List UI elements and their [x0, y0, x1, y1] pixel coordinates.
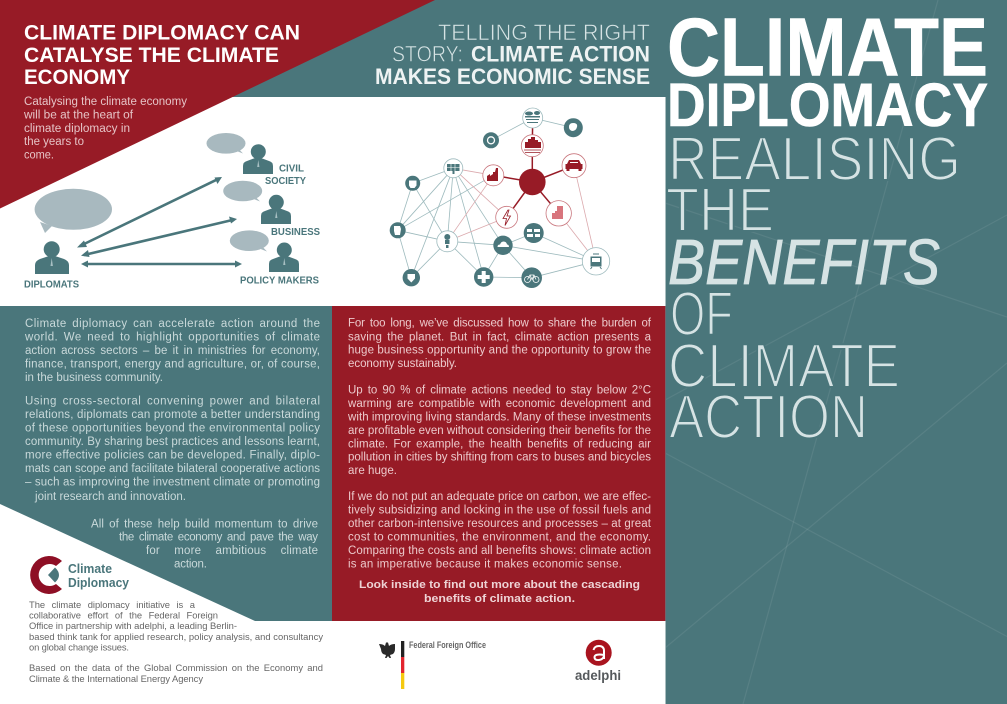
text block: catalysing intro: [23, 96, 187, 162]
text block: left body copy: – such as improving the investment climate or promoting: [25, 476, 320, 488]
flag bar: [401, 641, 404, 689]
text block: red body copy: economy sustainably.: [348, 358, 457, 370]
icon: diplomat person: [35, 241, 69, 274]
text block: red body copy: If we do not put an adequate price on carbon, we are effec-: [348, 491, 651, 503]
text block: initiative description: The climate diplomacy initiative is a: [29, 599, 196, 610]
red network links: [447, 166, 596, 261]
red hub links: [493, 118, 574, 217]
node: central hub: [519, 169, 546, 195]
heading: telling the right story: [375, 20, 650, 89]
panel: left teal body: [0, 306, 332, 621]
text block: left body copy: All of these help build momentum to drive: [91, 518, 318, 530]
heading: climate diplomacy can catalyse: ECONOMY: [24, 65, 130, 89]
logo wordmark: Climate: [68, 561, 112, 576]
office name: Federal Foreign Office: [409, 640, 486, 650]
text block: left body copy: more effective policies can be developed. Finally, diplo-: [25, 450, 320, 462]
node: bicycle: [521, 267, 542, 288]
heading: climate diplomacy can catalyse: CLIMATE DIPLOMACY CAN: [24, 20, 300, 44]
node: light bulb: [437, 231, 458, 252]
node: car: [562, 154, 586, 178]
text block: left body copy: Using cross-sectoral convening power and bilateral: [25, 396, 320, 408]
heading: telling the right story: STORY:: [392, 42, 463, 67]
text block: left body copy: for more ambitious climate: [146, 545, 318, 557]
text block: initiative description: Office in partnership with adelphi, a leading Berlin-: [29, 620, 237, 631]
callout: look inside: benefits of climate action.: [424, 593, 575, 605]
text block: left body copy: joint research and innovation.: [34, 491, 186, 503]
arrow: diplomats to business: [81, 216, 237, 257]
logo: adelphi: [575, 640, 621, 683]
node: city farm: [521, 135, 543, 157]
adelphi wordmark: adelphi: [575, 667, 621, 683]
node: recycling: [483, 132, 499, 148]
subtitle: realising the benefits of climate action: ACTION: [669, 383, 868, 452]
text block: red body copy: pollution in cities by shifting from cars to buses and bicycles: [348, 452, 651, 464]
teal network links: [398, 118, 596, 278]
text block: left body copy: relations, diplomats can promote a better understanding: [25, 409, 320, 421]
node: solar panel: [444, 159, 463, 178]
icon: business person: [261, 195, 291, 224]
text block: catalysing intro: come.: [24, 150, 54, 162]
icon: adelphi mark: [586, 640, 612, 666]
text block: initiative description: based think tank for applied research, policy analysis, and consultancy: [29, 631, 323, 642]
subtitle: realising the benefits of climate action: CLIMATE: [668, 332, 900, 401]
label: business: BUSINESS: [271, 227, 320, 238]
node: cloud: [493, 236, 513, 255]
text block: initiative description: [29, 599, 323, 684]
text block: initiative description: on global change issues.: [29, 642, 129, 652]
heading: telling the right story: CLIMATE ACTION: [471, 42, 650, 67]
text block: initiative description: Based on the data of the Global Commission on the Economy and: [29, 662, 323, 673]
title: climate diplomacy: [667, 0, 988, 140]
logo wordmark: Diplomacy: [68, 575, 130, 590]
node: health cross: [474, 267, 493, 287]
subtitle: realising the benefits of climate action: BENEFITS: [668, 226, 940, 298]
node: farm: [523, 108, 543, 128]
label: diplomats: DIPLOMATS: [24, 280, 79, 291]
text block: left body copy: finance, transport, energy and agriculture, or, of course,: [25, 358, 320, 370]
label: civil society: SOCIETY: [265, 176, 306, 187]
heading: telling the right story: MAKES ECONOMIC SENSE: [375, 64, 650, 89]
text block: left body copy: [24, 318, 320, 570]
text block: red body copy: other carbon-intensive resources and processes – at great: [348, 518, 652, 530]
text block: left body copy: the climate economy and pave the way: [119, 532, 318, 544]
icon: policy maker person: [269, 242, 299, 272]
text block: catalysing intro: climate diplomacy in: [24, 123, 130, 135]
text block: red body copy: Comparing the costs and all benefits shows: climate action: [348, 545, 651, 557]
icon: climate diplomacy mark: [30, 556, 62, 594]
speech bubble: diplomats: [35, 189, 112, 233]
heading: telling the right story: TELLING THE RIGHT: [438, 20, 650, 45]
node: transport cluster: [524, 223, 544, 243]
callout: look inside: [359, 579, 640, 605]
arrow: diplomats to policy makers: [81, 260, 242, 268]
subtitle: realising the benefits of climate action: REALISING: [668, 125, 961, 194]
text block: left body copy: Climate diplomacy can accelerate action around the: [25, 318, 320, 330]
label: civil society: [265, 164, 306, 187]
text block: red body copy: climate. For example, the health benefits of reducing air: [348, 438, 651, 450]
text block: red body copy: is an imperative because it makes economic sense.: [348, 558, 622, 570]
label: civil society: CIVIL: [279, 164, 304, 175]
text block: catalysing intro: the years to: [24, 136, 84, 148]
text block: left body copy: world. We need to highlight opportunities of climate: [24, 332, 320, 344]
text block: red body copy: huge business opportunity and the opportunity to grow the: [348, 345, 651, 357]
text block: red body copy: For too long, we’ve discussed how to share the burden of: [348, 318, 652, 330]
text block: left body copy: community. By sharing best practices and lessons learnt,: [25, 436, 320, 448]
logo wordmark: [68, 561, 130, 590]
arrow: diplomats to civil society: [77, 177, 222, 248]
node: industry: [483, 165, 504, 186]
text block: red body copy: are huge.: [348, 465, 397, 477]
text block: red body copy: tively subsidizing and locking in the use of fossil fuels and: [348, 504, 651, 516]
callout: look inside: Look inside to find out more about the cascading: [359, 579, 640, 591]
speech bubble: civil society: [206, 133, 246, 154]
heading: climate diplomacy can catalyse: [24, 20, 300, 89]
logo: federal foreign office: [379, 640, 486, 689]
text block: red body copy: cost to communities, the environment, and the economy.: [348, 532, 651, 544]
icon: civil society person: [243, 144, 273, 174]
text block: red body copy: Up to 90 % of climate actions needed to stay below 2°C: [348, 385, 651, 397]
subtitle: realising the benefits of climate action: [666, 125, 961, 452]
node: hand: [390, 222, 406, 238]
text block: left body copy: in the business community.: [25, 372, 163, 384]
text block: red body copy: [347, 318, 652, 570]
network diagram: cascading benefits: [390, 108, 610, 288]
diagram: diplomats and stakeholders: [24, 133, 320, 291]
text block: red body copy: are profitable even without considering their benefits for the: [348, 425, 651, 437]
text block: catalysing intro: Catalysing the climate economy: [24, 96, 187, 108]
logo: climate diplomacy: [30, 556, 130, 594]
speech bubble: business: [223, 181, 262, 202]
speech bubble: policy makers: [230, 230, 269, 252]
node: bolt: [496, 206, 518, 228]
text block: red body copy: saving the planet. But in fact, climate action presents a: [348, 331, 652, 343]
heading: climate diplomacy can catalyse: CATALYSE THE CLIMATE: [24, 43, 279, 67]
text block: left body copy: action.: [174, 558, 207, 570]
panel: right cover: [665, 0, 1007, 704]
panel: top teal band: [0, 0, 665, 97]
node: shield: [403, 269, 420, 286]
text block: left body copy: mats can scope and facilitate bilateral cooperative actions: [25, 463, 320, 475]
subtitle: realising the benefits of climate action: OF: [670, 280, 733, 349]
text block: left body copy: of these opportunities beyond the environmental policy: [25, 422, 320, 434]
panel: red body: [332, 306, 665, 621]
node: city: [546, 201, 571, 226]
icon: eagle: [379, 642, 395, 658]
node: tram: [582, 248, 610, 275]
node: leaf: [564, 118, 583, 137]
text block: red body copy: warming are compatible with economic development and: [347, 398, 651, 410]
text block: catalysing intro: will be at the heart of: [23, 110, 134, 122]
text block: initiative description: collaborative effort of the Federal Foreign: [29, 610, 218, 620]
label: policy makers: POLICY MAKERS: [240, 276, 319, 287]
text block: red body copy: with improving living standards. Many of these investments: [347, 412, 651, 424]
text block: initiative description: Climate & the International Energy Agency: [29, 673, 203, 684]
panel: red diagonal header: [0, 0, 435, 208]
text block: left body copy: action across sectors – be it in ministries for economy,: [25, 345, 320, 357]
node: fist: [405, 176, 420, 191]
subtitle: realising the benefits of climate action: THE: [666, 176, 774, 245]
